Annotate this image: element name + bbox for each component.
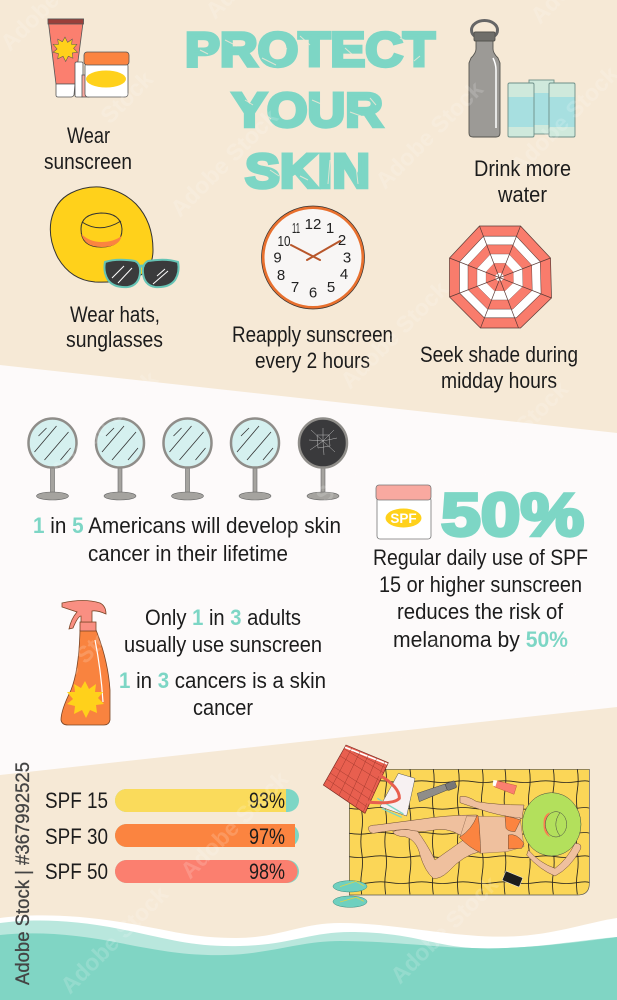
- stat: daily sunscreen text: 15 or higher sunscreen: [379, 572, 582, 597]
- bar: SPF 30: [45, 824, 299, 849]
- stat: 1 in 3 adults: Only 1 in 3 adults: [145, 605, 301, 630]
- stat: 1 in 5: cancer in their lifetime: [88, 541, 288, 566]
- mirror 3: [164, 418, 212, 500]
- glass left: [508, 83, 534, 137]
- woman: near arm: [527, 843, 581, 876]
- stat: daily sunscreen text: melanoma by 50%: [393, 627, 568, 652]
- stat: 1 in 3 cancers: 1 in 3 cancers is a skin: [119, 668, 326, 693]
- stock watermark pattern: Adobe Stock: [255, 446, 373, 564]
- label: wear hats, sunglasses: [66, 302, 163, 352]
- icon: wall clock: 9: [273, 250, 282, 266]
- waves: [0, 915, 617, 1000]
- woman: bent leg: [393, 829, 480, 878]
- label: reapply sunscreen: Reapply sunscreen: [232, 322, 393, 347]
- icon: wall clock: [262, 206, 364, 309]
- stat: 1 in 5: [33, 513, 341, 566]
- label: drink more water: water: [497, 182, 547, 207]
- white middle band: [0, 365, 617, 775]
- folded white towel: [380, 773, 415, 816]
- icon: wall clock: 7: [291, 279, 299, 296]
- steel bottle: [417, 784, 447, 802]
- glass back: [529, 80, 554, 134]
- bikini: [459, 815, 481, 853]
- bar: SPF 30: SPF 30: [45, 824, 108, 849]
- bag: [323, 745, 388, 813]
- title: PROTECT: [185, 24, 435, 77]
- icon: wall clock: 11: [292, 220, 300, 237]
- stat: 1 in 5: 1 in 5 Americans will develop skin: [33, 513, 341, 538]
- label: wear hats, sunglasses: sunglasses: [66, 327, 163, 352]
- icon row: five mirrors, one broken: [28, 418, 347, 500]
- label: wear sunscreen: [44, 123, 132, 174]
- label: wear sunscreen: Wear: [67, 123, 110, 148]
- stock watermark pattern: Adobe Stock: [165, 104, 283, 222]
- stock watermark pattern: Adobe Stock: [385, 871, 503, 989]
- big number: 50%: 50%: [441, 482, 584, 548]
- icon: spray bottle: [61, 600, 110, 725]
- icon: wall clock: 8: [277, 267, 285, 284]
- small tube: [494, 781, 517, 794]
- sunglasses: [104, 260, 140, 287]
- towel: [349, 769, 589, 895]
- woman: torso: [460, 816, 524, 853]
- stock watermark pattern: Stock: [95, 66, 158, 129]
- flip flops: [333, 881, 367, 907]
- label: wear hats, sunglasses: Wear hats,: [70, 302, 160, 327]
- icon: wall clock: 3: [343, 250, 351, 266]
- label: seek shade: midday hours: [441, 368, 557, 393]
- stat: 1 in 3 cancers: cancer: [193, 695, 253, 720]
- mirror 2: [96, 418, 144, 500]
- icon: wall clock: 12: [305, 216, 321, 233]
- title: [185, 24, 435, 198]
- stock watermark pattern: Adobe Stock: [455, 376, 573, 494]
- stat: 1 in 3 adults: usually use sunscreen: [124, 632, 322, 657]
- bar: SPF 15: [45, 788, 299, 813]
- mirror 4: [231, 418, 279, 500]
- stock watermark pattern: Adobe Stock: [15, 606, 133, 724]
- vertical stock id text: Adobe Stock | #367992525: [13, 762, 34, 985]
- icon: wall clock: 2: [338, 232, 346, 249]
- lip balm: [75, 62, 83, 97]
- stat: daily sunscreen text: [373, 545, 588, 652]
- green hat: [522, 793, 581, 856]
- icon: wall clock: 6: [309, 284, 317, 302]
- label: seek shade: [420, 342, 578, 393]
- hat: [50, 187, 153, 282]
- bar: SPF 15: SPF 15: [45, 788, 108, 813]
- bottle: [472, 20, 498, 40]
- tube: [48, 19, 84, 84]
- label: wear sunscreen: sunscreen: [44, 149, 132, 174]
- woman: straight leg: [368, 815, 480, 838]
- icon: wall clock: 5: [327, 279, 335, 296]
- illustration: woman on beach towel: [323, 745, 589, 907]
- label: seek shade: Seek shade during: [420, 342, 578, 367]
- icon: beach umbrella: [450, 226, 552, 328]
- label: reapply sunscreen: every 2 hours: [255, 348, 370, 373]
- mirror 1: [28, 418, 76, 500]
- icon: water bottle and glasses: [469, 20, 575, 137]
- stock watermark pattern: Adobe Stock: [55, 881, 173, 999]
- stat: daily sunscreen text: Regular daily use of SPF: [373, 545, 588, 570]
- bar: SPF 50: SPF 50: [45, 859, 108, 884]
- stat: 1 in 3 cancers: [119, 668, 326, 720]
- bar: SPF 50: 98%: [249, 859, 285, 884]
- icon: hat and sunglasses: [50, 187, 179, 287]
- icon: wall clock: 4: [340, 266, 348, 283]
- icon: SPF jar: [376, 485, 431, 539]
- bar: SPF 50: [45, 859, 299, 884]
- stock watermark pattern: Adobe Stock: [345, 611, 463, 729]
- label: drink more water: [474, 156, 571, 207]
- icon: sunscreen products: [48, 19, 129, 97]
- label: drink more water: Drink more: [474, 156, 571, 181]
- label: reapply sunscreen: [232, 322, 393, 373]
- woman: far arm: [460, 796, 524, 819]
- mirror 5: broken: [299, 418, 347, 500]
- title: SKIN: [245, 146, 370, 198]
- stat: 1 in 3 adults: [124, 605, 322, 657]
- icon: SPF jar: SPF: [390, 511, 417, 526]
- glass right: [549, 83, 575, 137]
- icon: wall clock: 10: [278, 233, 290, 250]
- title: YOUR: [232, 84, 383, 138]
- bar chart: SPF protection: [45, 788, 299, 884]
- stock watermark pattern: Adobe Stock: [370, 76, 488, 194]
- stat: daily sunscreen text: reduces the risk of: [397, 599, 564, 624]
- jar: [85, 63, 128, 97]
- stock watermark pattern: Adobe Stock: [175, 766, 293, 884]
- stock watermark pattern: Adobe Stock: [335, 276, 453, 394]
- stock watermark pattern: Adobe Stock: [45, 366, 163, 484]
- bar: SPF 30: 97%: [249, 824, 285, 849]
- icon: wall clock: 1: [326, 220, 334, 237]
- phone: [502, 871, 523, 887]
- bar: SPF 15: 93%: [249, 788, 285, 813]
